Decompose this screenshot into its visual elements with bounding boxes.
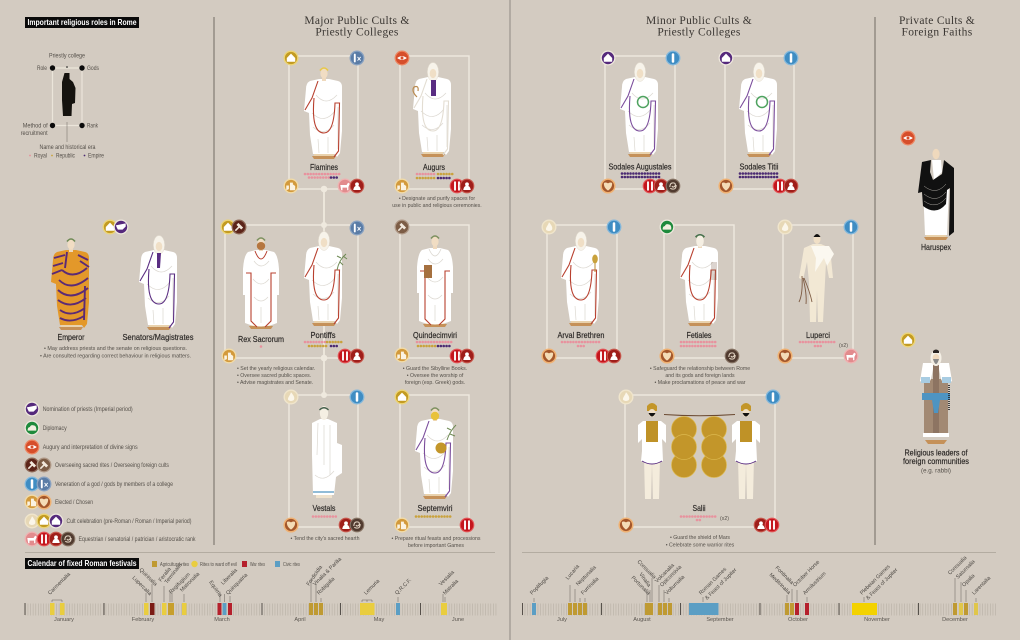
column divider right [874,17,876,545]
festival names: Consualia [636,559,657,580]
name [903,448,969,466]
era dots [681,342,718,346]
legend: elected [25,495,93,509]
key labels: Gods [87,66,99,72]
key labels: Rank [87,124,99,130]
note: (e.g. rabbi) [921,468,951,474]
panel: sodales titii [719,51,798,193]
festival names: Fordicidia [306,565,324,587]
month names: March [214,617,230,623]
description: • Guard the Sibylline Books. [403,366,467,372]
legend: diplomacy [25,421,67,435]
festival bars [532,603,978,615]
festival names [529,555,992,601]
festival names: Volturnalia [664,574,686,596]
legend [25,402,196,546]
name: Septemviri [418,503,453,513]
panel: arval brethren [542,220,621,363]
legend: civic: Civic rites [283,562,300,568]
festival names: Q.R.C.F. [394,578,413,596]
legend: augury: Augury and interpretation of divine signs [43,445,138,451]
name: foreign communities [903,456,969,466]
festival names: Furrinalia [580,576,600,596]
title: major cults: Priestly Colleges [315,26,399,38]
pontiff figure [304,232,347,326]
festival names: & Feast of Jupiter [704,567,738,601]
month names: January [54,617,74,623]
festival names: Carmentalia [47,572,72,596]
icons [395,390,474,532]
festival names: Saturnalia [955,559,977,580]
era dots [800,342,837,346]
icons [601,51,680,193]
name: Haruspex [921,242,952,252]
festival names: Vestalia [438,570,456,587]
festival names: Opiconsivia [659,564,683,588]
figure [304,68,342,159]
description: • Safeguard the relationship between Rome [650,366,750,372]
month names: July [557,617,567,623]
panel: augurs [392,51,482,209]
warrior right [732,403,760,499]
month separators [25,603,420,615]
senator figure [139,236,177,330]
legend: civic [275,561,300,568]
emperor figure [51,239,89,330]
legend: diplomacy: Diplomacy [43,426,67,432]
rex name: Rex Sacrorum [238,334,284,344]
festival bars [50,603,447,615]
legend: overseeing: Overseeing sacred rites / Overseeing foreign cults [55,463,169,469]
festival names: Meditrinalia [768,572,791,596]
description: • Oversee sacred public spaces. [237,373,311,379]
key labels: Royal [34,154,47,160]
era dots [416,515,453,518]
warrior left [638,403,666,499]
month names: October [788,617,808,623]
legend: elected: Elected / Chosen [55,500,93,506]
legend: agricultural [152,561,189,568]
figure [920,350,952,444]
key labels: Republic [56,154,75,160]
era dots [261,342,342,346]
description: use in public and religious ceremonies. [392,203,482,209]
day ticks [522,604,996,616]
name: Salii [692,503,706,513]
description: before important Games [408,543,464,549]
panel: sodales augustales [601,51,680,193]
name: Sodales Titii [740,162,779,172]
panel: vestals [284,390,364,542]
icons [284,390,364,532]
name: Quindecimviri [413,330,457,340]
column divider left [213,17,215,545]
description: • Set the yearly religious calendar. [237,366,315,372]
leader lines [52,580,445,602]
day ticks [25,604,498,616]
era dots [622,174,660,177]
fold divider [509,0,511,640]
festival names: Terminalia [164,562,184,585]
title: minor cults: Minor Public Cults & [646,15,752,27]
festival names: Portunalia [630,575,651,597]
senators name: Senators/Magistrates [122,332,194,342]
panel: salii [619,390,780,548]
description: • May address priests and the senate on religious questions. [44,346,187,352]
legend: war: War rites [250,562,265,568]
legend: rank: Equestrian / senatorial / patrician / aristocratic rank [78,537,196,543]
era dots [417,342,453,346]
festival names: Robigalia [316,576,336,596]
icons [395,220,474,363]
era dots [305,174,342,178]
calendar legend [152,561,300,568]
festival names: Matronalia [179,571,201,593]
legend: war [242,561,265,568]
legend: nomination: Nomination of priests (Imperial period) [43,407,133,413]
legend: evil [191,561,237,568]
legend: rank [25,532,196,546]
month names: May [374,617,384,623]
title: private cults: Private Cults & [899,15,975,27]
emperor name: Emperor [58,332,85,342]
description: foreign (esp. Greek) gods. [405,380,465,386]
month names: November [864,617,890,623]
figure [413,62,451,157]
month names: August [633,617,651,623]
description: • Guard the shield of Mars [670,535,730,541]
figure [415,408,456,499]
name: Vestals [312,503,336,513]
icons [719,51,798,193]
key labels [21,54,105,160]
era dots [681,516,718,520]
festival names: Lemuria [363,578,381,596]
icons [395,51,474,193]
panel: fetiales [650,220,750,386]
calendar timeline: july to december [522,555,996,623]
legend: cult celebration: Cult celebration (pre-Roman / Roman / Imperial period) [66,519,192,525]
festival names: Lucaria [565,564,581,581]
festival names: Volcanalia [654,563,676,584]
panel: flamines [284,51,364,193]
rod [664,414,735,416]
key dots [50,65,85,128]
icons [221,220,364,363]
icons [619,390,780,532]
heading: important roles: Important religious roles in Rome [28,18,137,27]
era dots [313,515,336,518]
key labels: Name and historical era [40,145,96,151]
name: Sodales Augustales [608,162,672,172]
description: • Celebrate some warrior rites [666,542,735,548]
legend: agricultural: Agricultural rites [160,562,189,568]
icons [542,220,621,363]
connector nodes [321,186,327,398]
festival names: Roman Games [698,566,728,596]
title: private cults: Foreign Faiths [902,26,973,38]
festival names: Fontinalia [774,565,794,586]
name: Fetiales [686,330,712,340]
month separators [522,603,918,615]
festival names: Poplifugia [529,575,550,596]
month names [54,617,464,623]
figure [739,62,777,157]
key figure [62,73,76,116]
icons [660,220,739,363]
panel: haruspex [901,131,954,252]
festival names: Larentalia [971,575,992,596]
era dots [417,174,453,178]
key labels: Empire [88,154,105,160]
festival names [47,557,460,598]
icons [103,220,128,234]
description: • Designate and purify spaces for [399,196,475,202]
legend: veneration: Veneration of a god / gods by members of a college [55,482,174,488]
festival names: Vinalia & Parilia [312,557,343,587]
name: Luperci [806,330,830,340]
figure [312,406,342,498]
key labels: Role [37,66,48,72]
name: Augurs [423,162,445,172]
panel: luperci [778,220,858,363]
month names: December [942,617,968,623]
key labels: recruitment [21,131,48,137]
panel: quindecimviri [395,220,474,386]
icons [778,220,858,363]
name: Religious leaders of [904,448,968,458]
icons [284,51,364,193]
legend: nomination [25,402,133,416]
key labels: Method of [23,124,48,130]
title: minor cults: Priestly Colleges [657,26,741,38]
festival names: Regifugium [168,572,192,595]
title: major cults: Major Public Cults & [304,15,410,27]
key labels: Priestly college [49,54,86,60]
festival names: Opalia [961,573,976,588]
icon [901,131,915,145]
panel: emperor and senators [40,220,194,360]
festival names: Quirinalia [138,567,158,588]
description: • Prepare ritual feasts and processions [392,536,480,542]
festival names: Lupercalia [131,575,152,597]
panel: rex sacrorum and pontiffs [221,220,364,386]
month names: September [706,617,734,623]
multiplier: (x2) [839,343,848,349]
era dots [562,342,600,346]
legend: cult celebration [25,514,191,528]
description: and its gods and foreign lands [665,373,735,379]
description [40,346,191,360]
panel: septemviri [392,390,481,549]
festival names: & Feast of Jupiter [865,567,899,601]
name: Flamines [310,162,338,172]
name: Arval Brethren [558,330,605,340]
leader lines [534,578,976,602]
legend: overseeing [25,458,169,472]
festival names: October Horse [792,559,821,588]
key diagram [21,54,105,160]
legend: augury [25,440,138,454]
month names: June [452,617,464,623]
pontiffs name: Pontiffs [310,330,336,340]
festival names: Neptunalia [575,565,598,587]
description: • Make proclamations of peace and war [655,380,746,386]
icon [901,333,915,347]
festival names: Feralia [158,567,173,583]
figure [918,149,954,240]
description: • Are consulted regarding correct behaviour in religious matters. [40,354,191,360]
shields [672,416,726,478]
calendar timeline: january to june [25,557,498,623]
festival names: Consualia [947,555,968,576]
festival names: Plebeian Games [859,564,892,596]
description: • Advise magistrates and Senate. [237,380,313,386]
festival names: Matralia [442,579,460,596]
figure [620,62,658,157]
key leader [66,122,68,142]
description: • Tend the city's sacred hearth [290,536,360,542]
festival names: Equirria [207,580,223,598]
figure [799,234,834,322]
era dots [740,174,778,177]
connector: major colleges [323,189,325,395]
figure [561,232,599,326]
figure [680,235,718,326]
festival names: Vinalia [637,572,652,588]
rex figure [243,238,279,329]
festival names: Quinquatria [225,572,249,596]
festival names: Liberalia [220,568,239,586]
multiplier: (x2) [720,516,729,522]
heading: calendar: Calendar of fixed Roman festivals [28,559,137,568]
panel: foreign leaders [901,333,969,474]
figure [417,236,453,327]
month names [557,617,968,623]
legend: veneration [25,477,174,491]
month names: April [294,617,306,623]
calendar rule [25,552,996,554]
description: • Oversee the worship of [407,373,464,379]
festival names: Armilustrium [802,571,828,596]
month names: February [132,617,154,623]
legend: evil: Rites to ward off evil [200,562,237,568]
